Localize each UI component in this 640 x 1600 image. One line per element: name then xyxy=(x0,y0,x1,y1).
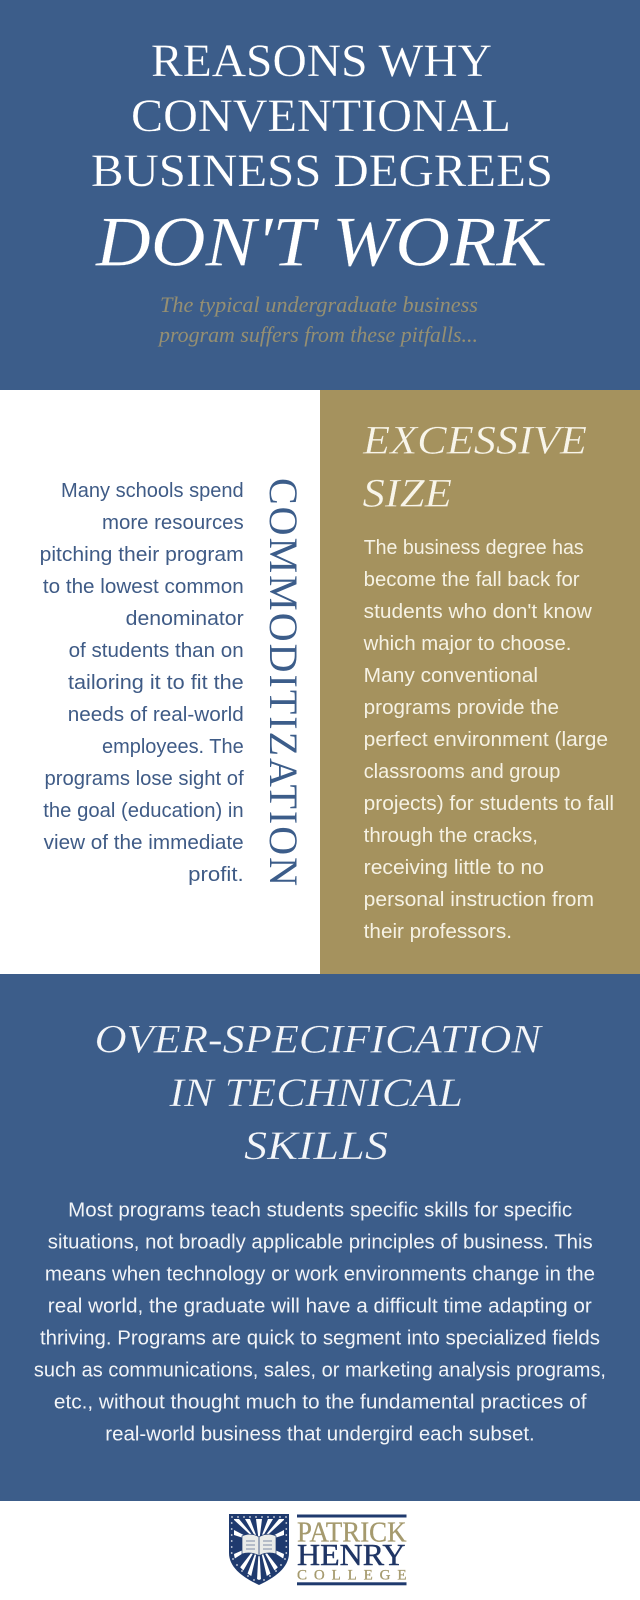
excessive size body text xyxy=(363,537,614,943)
excessive size body text: Many conventional xyxy=(364,665,538,687)
commoditization body text: the goal (education) in xyxy=(43,800,244,822)
excessive size body text: through the cracks, xyxy=(364,825,538,847)
over-specification body text: etc., without thought much to the fundamental practices of xyxy=(54,1392,587,1414)
over-specification body text: situations, not broadly applicable principles of business. This xyxy=(48,1232,593,1254)
logo wordmark xyxy=(297,1514,406,1585)
excessive size body text: which major to choose. xyxy=(363,633,571,655)
subtitle xyxy=(157,292,478,347)
over-specification body text: real-world business that undergird each subset. xyxy=(105,1424,535,1446)
over-specification heading: IN TECHNICAL xyxy=(168,1070,463,1115)
excessive size body text: projects) for students to fall xyxy=(364,793,614,815)
commoditization body text: view of the immediate xyxy=(44,832,244,854)
panel: commoditization xyxy=(0,390,320,974)
excessive size heading: EXCESSIVE xyxy=(362,418,587,462)
commoditization body text xyxy=(40,480,244,886)
commoditization body text: denominator xyxy=(126,608,244,630)
excessive size body text: classrooms and group xyxy=(364,761,560,783)
commoditization body text: of students than on xyxy=(69,640,244,662)
over-specification heading: OVER-SPECIFICATION xyxy=(95,1017,544,1062)
excessive size heading xyxy=(362,418,587,516)
commoditization body text: Many schools spend xyxy=(61,480,244,502)
panel: footer logo xyxy=(229,1514,406,1586)
over-specification heading: SKILLS xyxy=(244,1123,388,1168)
title: REASONS WHY xyxy=(151,35,492,87)
over-specification heading xyxy=(95,1017,544,1168)
commoditization body text: programs lose sight of xyxy=(44,768,244,790)
commoditization body text: more resources xyxy=(102,512,244,534)
over-specification body text: means when technology or work environments change in the xyxy=(45,1264,595,1286)
title xyxy=(91,35,553,282)
panel: over-specification xyxy=(0,974,640,1501)
subtitle: The typical undergraduate business xyxy=(160,292,478,317)
title: CONVENTIONAL xyxy=(131,90,511,142)
logo wordmark: HENRY xyxy=(297,1537,406,1572)
logo wordmark: PATRICK xyxy=(297,1518,406,1548)
excessive size body text: become the fall back for xyxy=(364,569,580,591)
excessive size heading: SIZE xyxy=(362,470,452,516)
commoditization body text: profit. xyxy=(188,864,244,886)
commoditization body text: tailoring it to fit the xyxy=(68,672,244,694)
commoditization vertical heading: COMMODITIZATION xyxy=(261,478,306,886)
commoditization body text: to the lowest common xyxy=(43,576,244,598)
subtitle: program suffers from these pitfalls... xyxy=(157,322,478,347)
panel: header xyxy=(0,0,640,390)
title: BUSINESS DEGREES xyxy=(91,145,553,197)
over-specification body text: thriving. Programs are quick to segment into specialized fields xyxy=(40,1328,600,1350)
excessive size body text: students who don't know xyxy=(364,601,592,623)
excessive size body text: personal instruction from xyxy=(364,889,594,911)
excessive size body text: receiving little to no xyxy=(364,857,544,879)
commoditization body text: employees. The xyxy=(102,736,244,758)
excessive size body text: their professors. xyxy=(364,921,512,943)
logo wordmark: COLLEGE xyxy=(297,1567,406,1583)
excessive size body text: perfect environment (large xyxy=(364,729,608,751)
excessive size body text: programs provide the xyxy=(364,697,559,719)
commoditization body text: needs of real-world xyxy=(68,704,244,726)
icon: open book xyxy=(242,1534,276,1556)
over-specification body text xyxy=(34,1200,606,1446)
panel: excessive size xyxy=(320,390,640,974)
over-specification body text: such as communications, sales, or marketing analysis programs, xyxy=(34,1360,606,1382)
commoditization body text: pitching their program xyxy=(40,544,244,566)
excessive size body text: The business degree has xyxy=(364,537,584,559)
icon: college shield xyxy=(229,1514,289,1585)
over-specification body text: real world, the graduate will have a difficult time adapting or xyxy=(48,1296,592,1318)
over-specification body text: Most programs teach students specific skills for specific xyxy=(68,1200,572,1222)
title: DON'T WORK xyxy=(95,204,551,282)
